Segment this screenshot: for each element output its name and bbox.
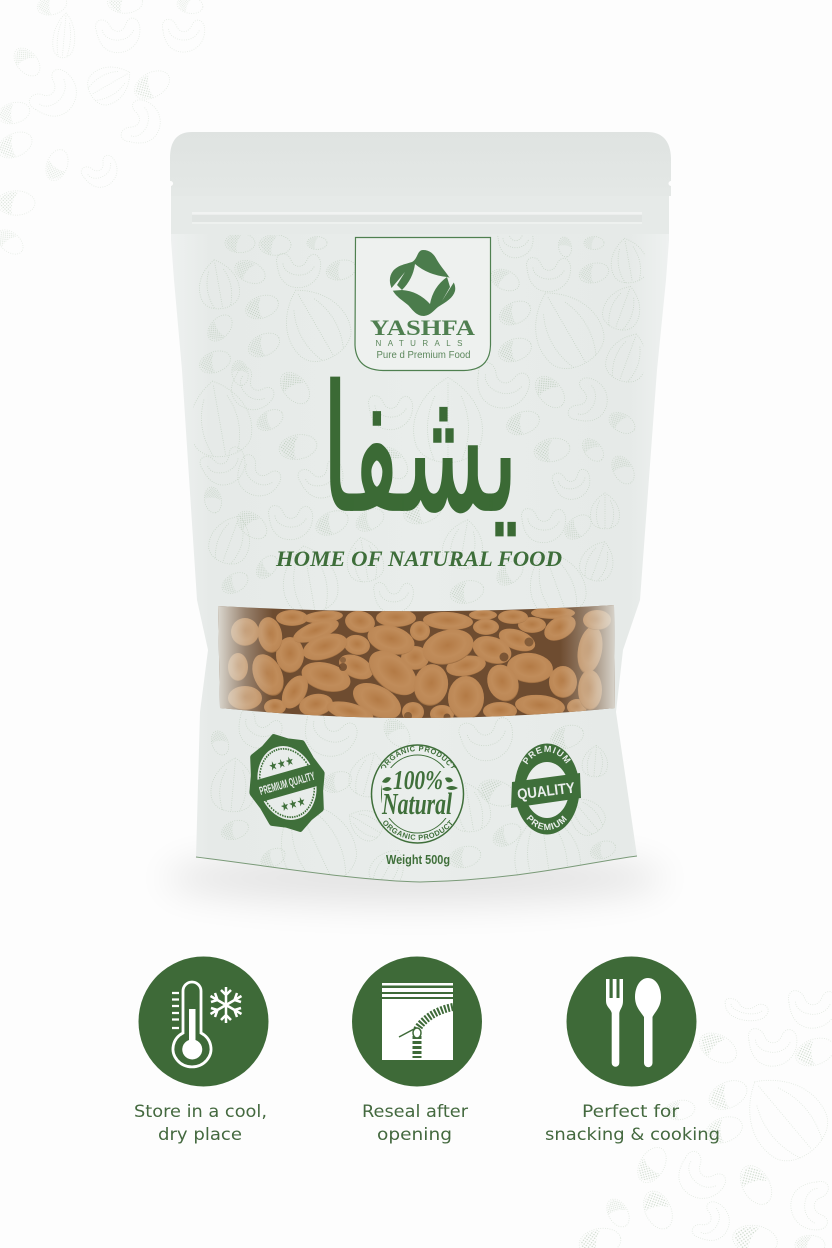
label: Perfect for [582, 1102, 679, 1121]
label [362, 1102, 468, 1144]
Arabic brand name: يشفا [321, 348, 519, 552]
label: Store in a cool, [134, 1102, 267, 1121]
slogan: HOME OF NATURAL FOOD [275, 546, 562, 571]
product window with pine nuts [218, 605, 615, 718]
benefit: uses [545, 956, 720, 1144]
pouch shadow [165, 852, 665, 904]
product pouch [170, 132, 671, 882]
label [545, 1102, 720, 1144]
stamp: 100% natural: ORGANIC PRODUCT [380, 746, 456, 769]
stamp: 100% natural: ORGANIC PRODUCT [383, 820, 452, 840]
stamp: premium quality: PREMIUM [522, 746, 571, 764]
stamp: 100% natural: Natural [381, 786, 452, 821]
brand tagline: Pure d Premium Food [376, 350, 470, 361]
printed nut pattern [182, 230, 655, 898]
decorative nuts: bottom right [577, 991, 832, 1248]
logo mark [389, 250, 456, 316]
stamp: premium quality: QUALITY [516, 780, 576, 803]
brand subtitle: NATURALS [376, 339, 462, 348]
label [134, 1102, 267, 1144]
seal badge: quality [239, 728, 335, 838]
zip seal ridge [171, 196, 669, 234]
label: dry place [158, 1125, 242, 1144]
seal badge: quality: PREMIUM QUALITY [258, 771, 317, 798]
seal badge: quality: ★★★ [279, 794, 307, 815]
label: snacking & cooking [545, 1125, 720, 1144]
brand name: YASHFA [370, 315, 475, 340]
stamp: premium quality: PREMIUM [526, 814, 567, 830]
decorative nuts: top left [0, 0, 205, 259]
label: opening [377, 1125, 452, 1144]
icon: fork and spoon [566, 956, 696, 1086]
pouch top header [170, 132, 671, 196]
stamp: 100% natural [370, 744, 464, 844]
icon: thermometer and snowflake [138, 956, 268, 1086]
benefit: storage [134, 956, 268, 1144]
stamp: premium quality [511, 744, 581, 834]
weight label: Weight 500g [386, 853, 450, 867]
icon: zip bag [352, 956, 482, 1086]
stamp: 100% natural: 100% [393, 765, 443, 795]
label: Reseal after [362, 1102, 468, 1121]
logo box [355, 238, 490, 370]
pouch body [171, 186, 669, 882]
pouch bottom edge [196, 856, 637, 882]
seal badge: quality: ★★★ [267, 753, 296, 774]
benefit: reseal [352, 956, 482, 1144]
